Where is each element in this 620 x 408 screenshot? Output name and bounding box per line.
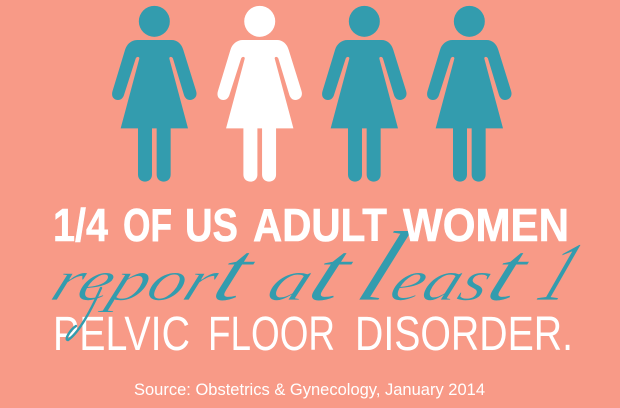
script headline line: [41, 212, 597, 322]
icon: teal woman 3: [322, 6, 407, 182]
headline: first line: WOMEN: [403, 199, 569, 251]
source note: Source: Obstetrics & Gynecology, January 2014: [134, 380, 485, 399]
icon: teal woman 1: [112, 6, 197, 182]
headline: first line: 1/4: [53, 199, 108, 251]
pictogram row: four women: [112, 6, 512, 182]
script headline line: at: [257, 225, 370, 318]
icon: teal woman 4: [427, 6, 512, 182]
headline: third line: DISORDER.: [355, 308, 573, 361]
headline: first line: US: [185, 199, 238, 251]
script headline line: least: [343, 212, 551, 322]
script headline line: report: [41, 225, 272, 318]
script headline line: 1: [526, 227, 597, 319]
headline: third line: [53, 308, 573, 361]
headline: first line: OF: [123, 199, 172, 251]
script flourish: tail of the p: [67, 288, 101, 340]
headline: third line: PELVIC: [53, 308, 190, 361]
headline: third line: FLOOR: [208, 308, 335, 361]
headline: first line: ADULT: [253, 199, 387, 251]
icon: white woman: [217, 6, 302, 182]
headline: first line: [53, 199, 569, 251]
